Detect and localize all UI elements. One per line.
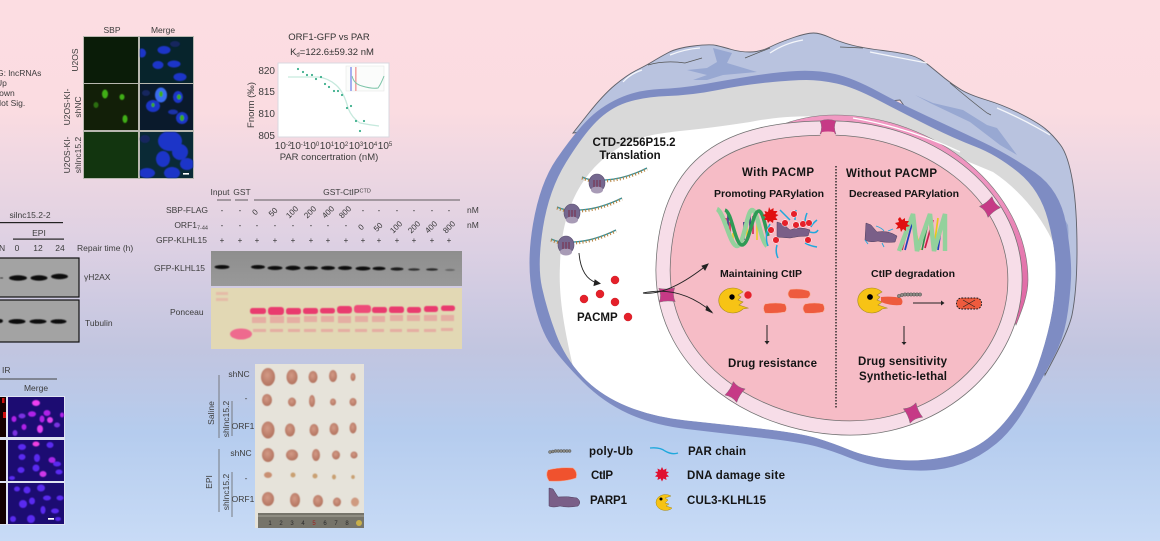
group labels: shlnc15.2 bbox=[221, 474, 231, 510]
dose values: - bbox=[345, 221, 348, 230]
axis ticks: 0 bbox=[316, 142, 320, 148]
subheading: Decreased PARylation bbox=[849, 188, 959, 200]
dose values: + bbox=[220, 236, 225, 245]
dose values: - bbox=[448, 206, 451, 215]
ruler: 2 bbox=[279, 521, 283, 527]
cytoplasm gray and white zones bbox=[540, 80, 1056, 460]
axis ticks: 10 bbox=[275, 141, 286, 152]
dose values bbox=[220, 204, 458, 245]
ruler: 1 bbox=[268, 521, 272, 527]
panel: IR immunofluorescence bbox=[0, 365, 65, 525]
dose values: 100 bbox=[284, 204, 301, 220]
label Tubulin: Tubulin bbox=[85, 318, 113, 328]
dose values: - bbox=[221, 221, 224, 230]
row labels: 7-44 bbox=[197, 226, 208, 232]
dose values: 0 bbox=[356, 222, 366, 232]
ruler: 5 bbox=[312, 521, 316, 527]
dose values: + bbox=[412, 236, 417, 245]
dose values: 200 bbox=[302, 204, 319, 220]
outcome text: Drug sensitivity bbox=[858, 356, 948, 368]
dose values: - bbox=[378, 206, 381, 215]
chart title: d bbox=[296, 52, 300, 58]
blot: Ponceau bbox=[211, 288, 462, 349]
legend: CtIP bbox=[547, 468, 613, 482]
divider bbox=[835, 166, 837, 408]
axis ticks: 820 bbox=[258, 66, 275, 77]
dose values: 50 bbox=[372, 221, 385, 234]
icon: ribosome 1 bbox=[582, 168, 647, 194]
panel: GST pulldown blot bbox=[154, 187, 479, 349]
group labels: ORF1 bbox=[232, 494, 255, 504]
column headers bbox=[211, 187, 460, 200]
plot area bbox=[278, 63, 389, 137]
group labels: shNC bbox=[230, 448, 252, 458]
legend: DNA damage site: DNA damage site bbox=[687, 470, 785, 482]
label gamma-H2AX: γH2AX bbox=[84, 272, 111, 282]
heading: With PACMP bbox=[742, 167, 814, 179]
label GFP-KLHL15: GFP-KLHL15 bbox=[154, 263, 205, 273]
axis ticks: 10 bbox=[334, 141, 345, 152]
dose values: + bbox=[447, 236, 452, 245]
panel: fluorescence microscopy SBP and Merge bbox=[62, 25, 194, 179]
dose values: + bbox=[361, 236, 366, 245]
axis ticks: 3 bbox=[360, 142, 364, 148]
column headings bbox=[103, 25, 175, 35]
dose values: 200 bbox=[406, 219, 423, 235]
chart title bbox=[288, 32, 374, 58]
dose values: - bbox=[310, 221, 313, 230]
ruler: 4 bbox=[301, 521, 305, 527]
axis ticks bbox=[258, 66, 393, 152]
blot headers: silnc15.2-2 bbox=[9, 210, 51, 220]
axis ticks: 810 bbox=[258, 109, 275, 120]
illustration: PARP1 and DNA bbox=[865, 214, 945, 251]
arrow: translation to PACMP bbox=[579, 253, 600, 286]
outcome text bbox=[858, 356, 948, 383]
dose values: - bbox=[239, 206, 242, 215]
axis ticks: 10 bbox=[320, 141, 331, 152]
ruler bbox=[258, 513, 364, 528]
dose values: 800 bbox=[337, 204, 354, 220]
legend: PAR chain bbox=[650, 446, 746, 458]
dose values: - bbox=[221, 206, 224, 215]
row labels: shlnc15.2 bbox=[73, 137, 83, 173]
row labels: U2OS bbox=[70, 48, 80, 72]
group labels: shNC bbox=[228, 369, 250, 379]
row labels: shNC bbox=[73, 96, 83, 118]
dose values: - bbox=[239, 221, 242, 230]
outcome text: Synthetic-lethal bbox=[859, 371, 947, 383]
column headers: GST-CtIP bbox=[323, 187, 360, 197]
axis labels: PAR concertration (nM) bbox=[280, 152, 378, 163]
axis ticks: 815 bbox=[258, 87, 275, 98]
dose values: + bbox=[238, 236, 243, 245]
blot headers: 24 bbox=[55, 243, 65, 253]
dose values: - bbox=[413, 206, 416, 215]
axis ticks: 1 bbox=[331, 142, 335, 148]
panel: western blot gamma-H2AX and Tubulin bbox=[0, 210, 133, 342]
row labels bbox=[62, 48, 83, 173]
row labels: U2OS-KI- bbox=[62, 136, 72, 173]
row labels: SBP-FLAG bbox=[166, 205, 208, 215]
section: Without PACMP bbox=[846, 168, 982, 383]
column headers: CTD bbox=[360, 188, 371, 194]
icon: CUL3-KLHL15 with CtIP bbox=[858, 288, 902, 313]
axis ticks: -1 bbox=[301, 142, 307, 148]
row labels: ORF1 bbox=[174, 220, 197, 230]
icon: ribosome 2 bbox=[557, 198, 622, 224]
axis ticks: -2 bbox=[286, 142, 292, 148]
dose values: - bbox=[256, 221, 259, 230]
legend: poly-Ub: poly-Ub bbox=[589, 446, 633, 458]
cell membrane fold cap bbox=[573, 33, 1077, 375]
photo bbox=[255, 364, 364, 528]
ruler: 3 bbox=[290, 521, 294, 527]
dose values: - bbox=[431, 206, 434, 215]
dose values: + bbox=[377, 236, 382, 245]
panel: binding curve chart bbox=[246, 32, 393, 163]
dose values: 100 bbox=[388, 219, 405, 235]
arrow down bbox=[764, 325, 770, 344]
nucleus bbox=[659, 120, 1015, 428]
dose values: - bbox=[327, 221, 330, 230]
label: translation: CTD-2256P15.2 bbox=[592, 137, 676, 149]
panel: tumor photograph bbox=[204, 364, 364, 528]
axis ticks: 10 bbox=[305, 141, 316, 152]
dose values: + bbox=[395, 236, 400, 245]
axis ticks: 10 bbox=[349, 141, 360, 152]
arrow: degradation bbox=[913, 300, 944, 306]
legend: CUL3-KLHL15: CUL3-KLHL15 bbox=[687, 495, 767, 507]
group labels: - bbox=[245, 393, 248, 403]
legend bbox=[547, 446, 785, 511]
dose values: + bbox=[344, 236, 349, 245]
group labels: - bbox=[245, 473, 248, 483]
dose values: 800 bbox=[441, 219, 458, 235]
blot: GFP-KLHL15 bbox=[211, 251, 462, 286]
blot headers bbox=[0, 210, 133, 253]
dose values: 0 bbox=[250, 207, 260, 217]
chart title: K bbox=[290, 47, 296, 58]
blot headers: EPI bbox=[32, 228, 46, 238]
label Ponceau: Ponceau bbox=[170, 307, 204, 317]
dose values: + bbox=[255, 236, 260, 245]
dose values: 50 bbox=[267, 206, 280, 219]
dose values: + bbox=[273, 236, 278, 245]
axis ticks: 4 bbox=[374, 142, 378, 148]
row labels: GFP-KLHL15 bbox=[156, 235, 207, 245]
axis labels: Fnorm (‰) bbox=[246, 82, 257, 128]
column headings: SBP bbox=[103, 25, 121, 35]
axis ticks: 2 bbox=[345, 142, 349, 148]
dose values: + bbox=[430, 236, 435, 245]
illustration: DNA with PARP1 bbox=[717, 207, 818, 258]
dose values: + bbox=[309, 236, 314, 245]
outcome text: Drug resistance bbox=[728, 358, 817, 370]
dose values: + bbox=[291, 236, 296, 245]
subheading: Maintaining CtIP bbox=[720, 268, 802, 280]
legend: PARP1 bbox=[549, 488, 628, 507]
legend: DNA damage site bbox=[655, 467, 785, 482]
section: With PACMP bbox=[714, 167, 824, 370]
dose values: - bbox=[362, 206, 365, 215]
row labels: nM bbox=[467, 220, 479, 230]
blot headers: 12 bbox=[33, 243, 43, 253]
blot headers: 0 bbox=[15, 243, 20, 253]
chart title: =122.6±59.32 nM bbox=[300, 47, 374, 58]
legend: PARP1: PARP1 bbox=[590, 495, 628, 507]
IR heading: Merge bbox=[24, 383, 48, 393]
image grid bbox=[83, 36, 194, 179]
axis ticks: 5 bbox=[389, 142, 393, 148]
icon: ribosome 3 bbox=[551, 230, 616, 256]
IR heading: IR bbox=[2, 365, 10, 375]
dose values: 400 bbox=[320, 204, 337, 220]
row labels: U2OS-KI- bbox=[62, 88, 72, 125]
chart title: ORF1-GFP vs PAR bbox=[288, 32, 370, 43]
blot: Tubulin bbox=[0, 300, 79, 342]
axis ticks: 10 bbox=[290, 141, 301, 152]
group labels: Saline bbox=[206, 401, 216, 425]
cell blue cortex band bbox=[530, 71, 1071, 471]
arrows: entry to nucleus bbox=[643, 264, 712, 312]
icons: CtIP proteins bbox=[764, 289, 824, 313]
group labels: EPI bbox=[204, 475, 214, 489]
legend: poly-Ub bbox=[548, 446, 633, 458]
nuclear pores bbox=[659, 120, 1001, 423]
dose values: + bbox=[326, 236, 331, 245]
column headers: GST bbox=[233, 187, 251, 197]
column headings: Merge bbox=[151, 25, 175, 35]
blot headers: Repair time (h) bbox=[77, 243, 133, 253]
icon: poly-Ub chain bbox=[897, 293, 922, 298]
row labels: nM bbox=[467, 205, 479, 215]
heading: Without PACMP bbox=[846, 168, 937, 180]
PACMP particles bbox=[580, 276, 632, 321]
dose values: - bbox=[274, 221, 277, 230]
subheading: Promoting PARylation bbox=[714, 188, 824, 200]
arrow down bbox=[902, 326, 906, 345]
ruler: 6 bbox=[323, 521, 327, 527]
subheading: CtIP degradation bbox=[871, 268, 955, 280]
dose values: - bbox=[396, 206, 399, 215]
label: PACMP: PACMP bbox=[577, 312, 618, 324]
label: translation: Translation bbox=[599, 150, 661, 162]
column headers: Input bbox=[211, 187, 230, 197]
group labels: ORF1 bbox=[232, 421, 255, 431]
icon: degraded CtIP bbox=[956, 298, 982, 309]
legend: CUL3-KLHL15 bbox=[656, 495, 767, 511]
group labels: shlnc15.2 bbox=[221, 401, 231, 437]
legend: CtIP: CtIP bbox=[591, 470, 613, 482]
IR heading bbox=[0, 365, 57, 393]
blot: gamma-H2AX bbox=[0, 258, 79, 297]
dose values: - bbox=[292, 221, 295, 230]
nuclear envelope crescent bbox=[735, 115, 1028, 325]
ruler: 7 bbox=[334, 521, 338, 527]
icon: CUL3-KLHL15 with PACMP bbox=[719, 288, 752, 313]
group labels bbox=[204, 369, 255, 517]
panel: cell model diagram bbox=[530, 32, 1078, 471]
dose values: 400 bbox=[423, 219, 440, 235]
legend: PAR chain: PAR chain bbox=[688, 446, 746, 458]
axis labels bbox=[246, 82, 378, 163]
ruler: 8 bbox=[345, 521, 349, 527]
legend text fragment: lncRNA categories bbox=[0, 68, 41, 108]
row labels bbox=[156, 205, 479, 245]
label: translation bbox=[592, 137, 676, 162]
axis ticks: 10 bbox=[378, 141, 389, 152]
axis ticks: 805 bbox=[258, 131, 275, 142]
image column bbox=[0, 396, 65, 525]
axis ticks: 10 bbox=[363, 141, 374, 152]
